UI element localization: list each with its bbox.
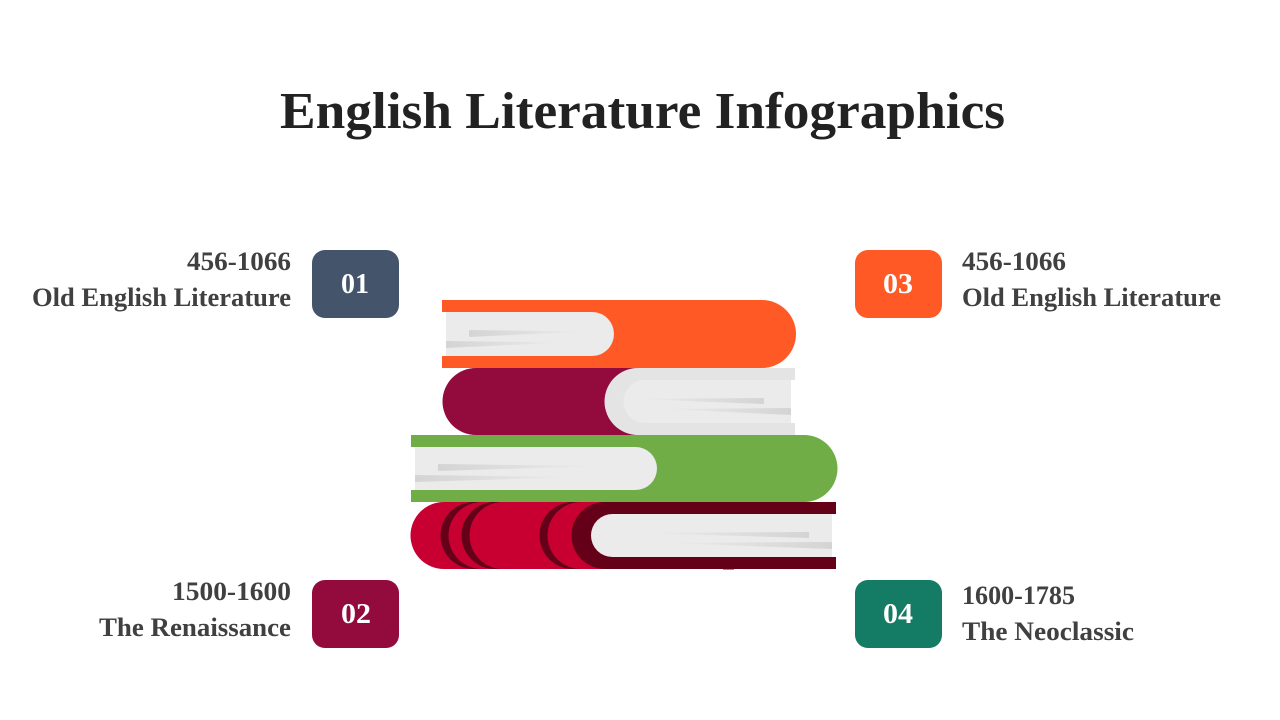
badge 04: [855, 580, 942, 648]
title: English Literature Infographics: [280, 83, 1005, 140]
badge 01: 01: [341, 268, 369, 300]
badge 03: 03: [883, 268, 913, 300]
text: item 04: The Neoclassic: [962, 617, 1134, 646]
item 04: The Neoclassic: [855, 580, 1134, 648]
badge 02: 02: [341, 598, 371, 630]
book: orange top: [442, 300, 796, 368]
text: item 04: [962, 581, 1134, 646]
text: item 02: 1500-1600: [172, 577, 291, 606]
text: item 02: The Renaissance: [99, 613, 291, 642]
item 02: The Renaissance: [99, 577, 399, 648]
text: item 03: Old English Literature: [962, 283, 1221, 312]
illustration: stack of books: [410, 300, 838, 570]
text: item 01: Old English Literature: [32, 283, 291, 312]
badge 04: 04: [883, 598, 913, 630]
item 01: Old English Literature: [32, 247, 399, 318]
text: item 01: 456-1066: [187, 247, 291, 276]
book: red bottom: [410, 502, 836, 570]
text: item 02: [99, 577, 291, 642]
badge 02: [312, 580, 399, 648]
badge 03: [855, 250, 942, 318]
text: item 03: [962, 247, 1221, 312]
text: item 01: [32, 247, 291, 312]
book: green: [411, 435, 838, 502]
item 03: Old English Literature: [855, 247, 1221, 318]
text: item 03: 456-1066: [962, 247, 1066, 276]
book: maroon: [442, 368, 795, 435]
badge 01: [312, 250, 399, 318]
text: item 04: 1600-1785: [962, 581, 1075, 610]
